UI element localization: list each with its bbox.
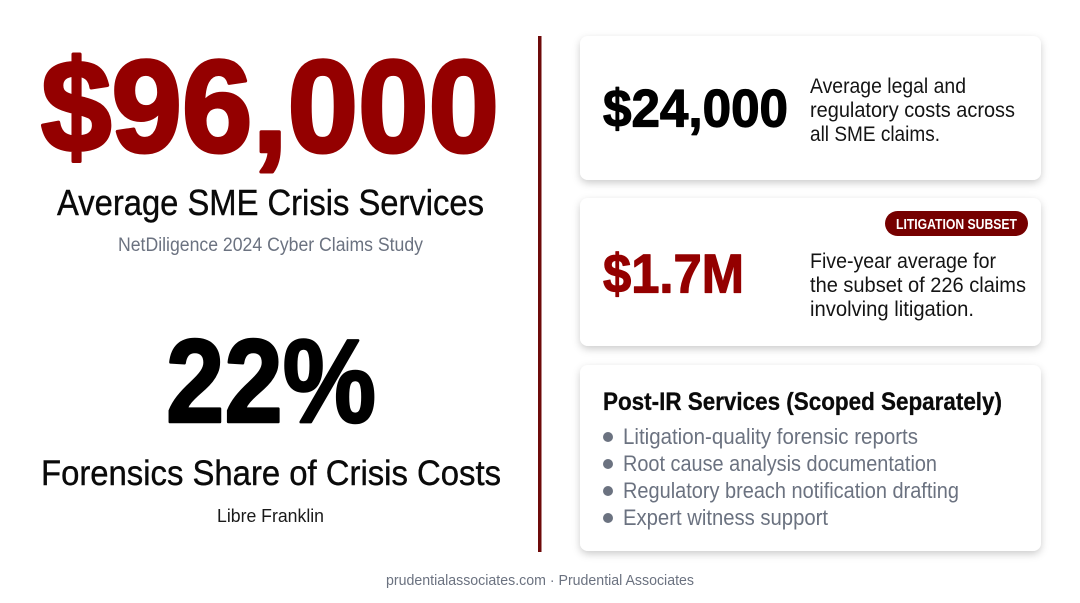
label: Average SME Crisis Services: Average SME Crisis Services [57,182,484,223]
heading: Post-IR Services: Post-IR Services (Scoped Separately) [603,388,1002,416]
stat: $1.7M: $1.7M [603,242,744,304]
bullet list: Regulatory breach notification drafting [623,478,959,503]
source: NetDiligence study: NetDiligence 2024 Cyber Claims Study [118,235,423,256]
badge: litigation subset: LITIGATION SUBSET [896,217,1017,233]
panel: litigation subset [580,198,1041,346]
bullet list: Litigation-quality forensic reports [623,424,918,449]
bullet list: Expert witness support [623,505,828,530]
description: legal and regulatory costs [810,75,1015,146]
footer: prudentialassociates.com · Prudential Associates [386,572,694,589]
vertical divider [538,36,542,552]
stat: 22%: 22% [166,315,376,448]
description: litigation claims: Five-year average for [810,250,996,273]
description: legal and regulatory costs: regulatory costs across [810,99,1015,122]
badge: litigation subset [885,211,1028,236]
bullet list [603,424,959,530]
stat: $24,000: $24,000 [603,80,788,138]
description: legal and regulatory costs: all SME claims. [810,123,940,146]
stat: $96,000: $96,000 [41,32,499,180]
caption: Libre Franklin: Libre Franklin [217,506,324,526]
description: litigation claims: the subset of 226 claims [810,274,1026,297]
description: litigation claims: involving litigation. [810,298,974,321]
panel: left key statistics [41,32,501,526]
panel: post-IR services [580,365,1041,551]
label: Forensics Share of Crisis Costs: Forensics Share of Crisis Costs [41,454,501,493]
description: legal and regulatory costs: Average legal and [810,75,966,98]
bullet list: Root cause analysis documentation [623,451,937,476]
description: litigation claims [810,250,1026,321]
panel: legal and regulatory costs [580,36,1041,180]
